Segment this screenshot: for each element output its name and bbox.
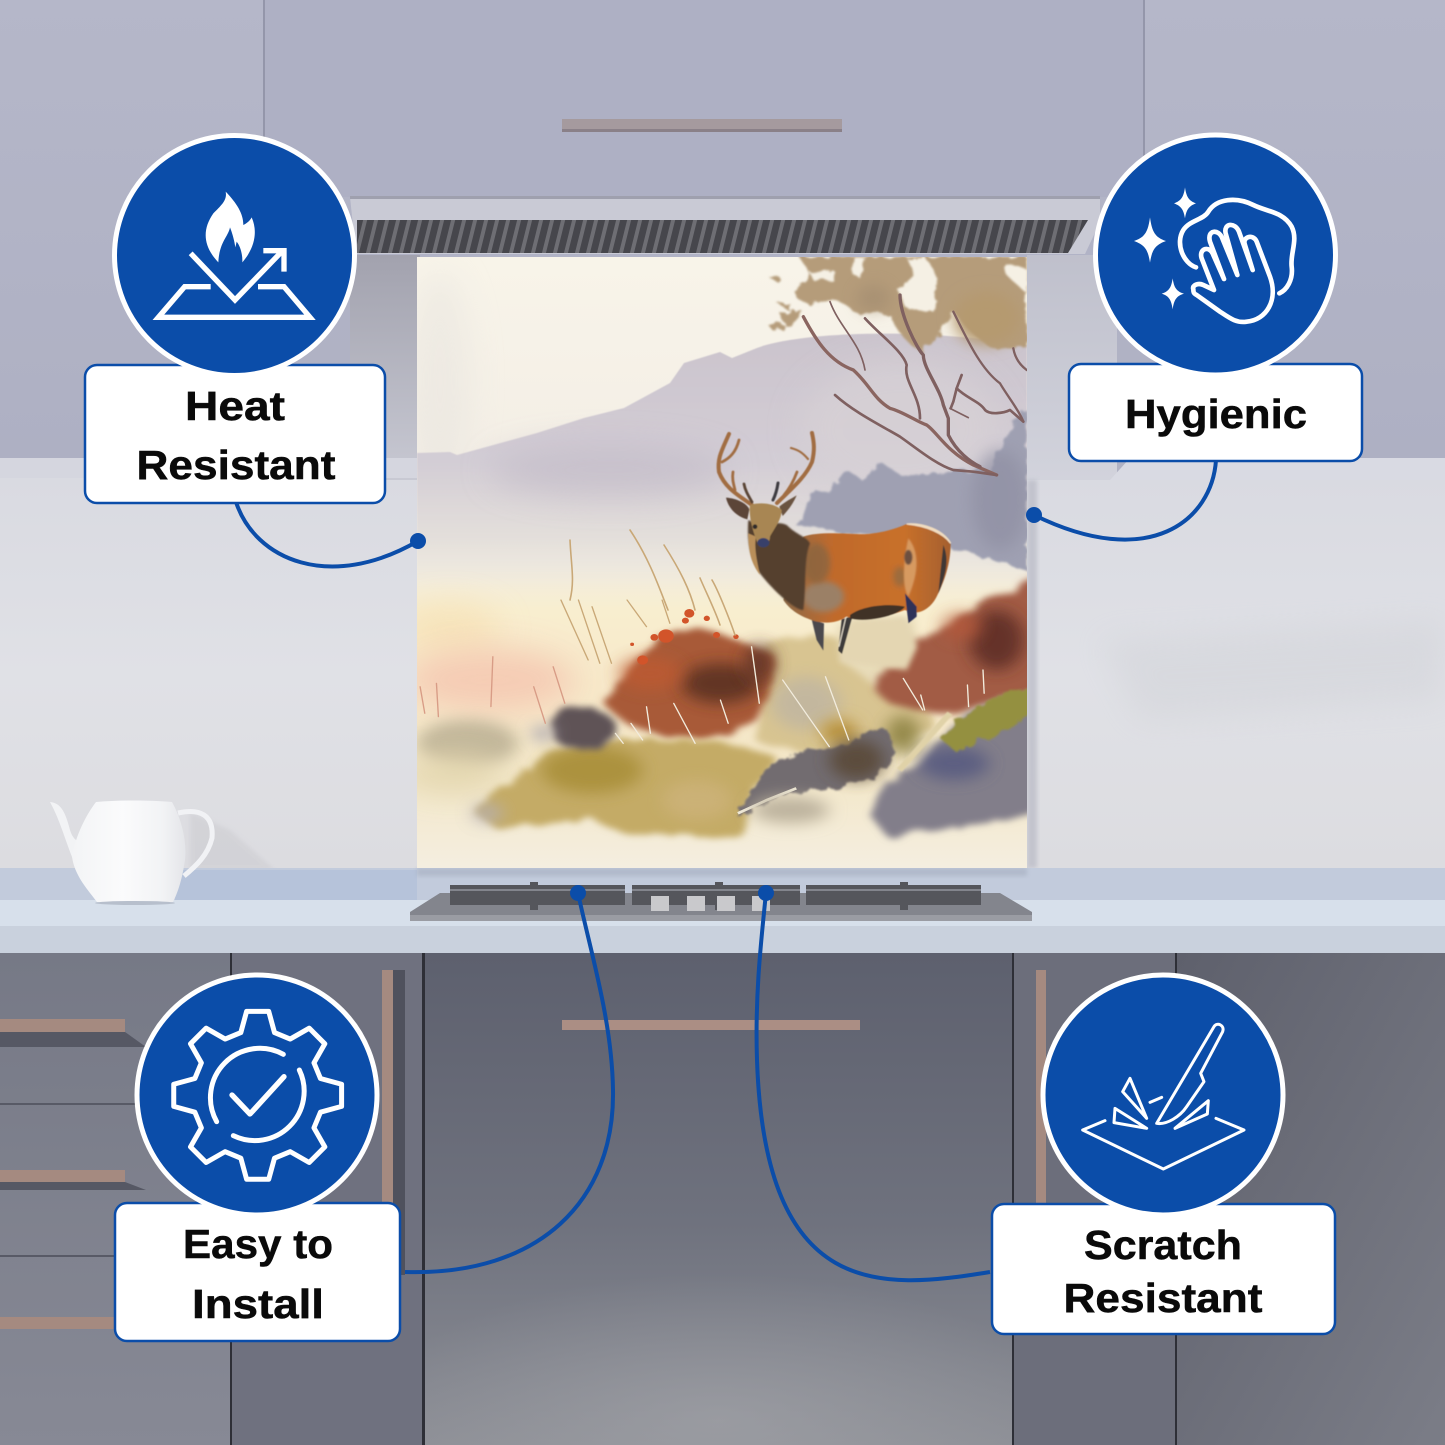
badge circle xyxy=(1096,135,1336,375)
badge circle xyxy=(114,136,354,376)
ears xyxy=(726,498,749,519)
label box xyxy=(115,1203,400,1341)
pale grass blades xyxy=(615,647,984,747)
mid tan grass xyxy=(755,637,930,752)
neck mane xyxy=(748,520,810,610)
label text line 2: Install xyxy=(192,1281,324,1327)
label text line 2: Resistant xyxy=(1064,1275,1263,1321)
callout connector: Scratch Resistant xyxy=(757,885,990,1280)
badge circle xyxy=(137,975,377,1215)
callout connector: Easy to Install xyxy=(405,885,613,1272)
dark hip patch xyxy=(905,593,917,623)
label text: Easy to xyxy=(183,1221,333,1267)
hillside and lower painting, mapped from detail coordinates xyxy=(401,570,1039,841)
pale grass behind legs xyxy=(840,617,917,670)
callout: Hygienic xyxy=(1069,135,1362,461)
pink grass stems xyxy=(420,657,565,723)
label box xyxy=(992,1204,1335,1334)
label text: Scratch xyxy=(1084,1222,1242,1268)
stag xyxy=(719,433,951,670)
label box xyxy=(1069,364,1362,461)
lower cabinets xyxy=(0,953,1445,1445)
right rock xyxy=(868,690,1039,833)
right heather bush xyxy=(872,570,1039,713)
head xyxy=(750,503,782,547)
label box xyxy=(85,365,385,503)
pale grass under stag xyxy=(837,617,923,687)
callout connector: Hygienic xyxy=(1026,460,1216,540)
callout: Easy to Install xyxy=(115,975,400,1341)
label text: Hygienic xyxy=(1125,391,1307,437)
icon: hand wiping with sparkles xyxy=(1134,187,1294,322)
range hood xyxy=(350,196,1100,254)
countertop xyxy=(0,868,1445,953)
ochre foreground grass xyxy=(475,739,779,841)
teapot xyxy=(50,800,212,905)
centre rock xyxy=(736,729,893,817)
painting: watercolor stag on misty moor xyxy=(400,257,1039,868)
callout: Scratch Resistant xyxy=(992,975,1335,1334)
distant forest xyxy=(795,410,1027,570)
background: wall and shelves xyxy=(0,255,1445,870)
tan grass stems xyxy=(561,600,670,663)
distant left grasses xyxy=(417,720,518,767)
gas hob xyxy=(410,882,1032,921)
callout: Heat Resistant xyxy=(85,136,385,503)
orange splatter xyxy=(630,609,739,665)
antlers xyxy=(719,433,814,505)
body xyxy=(783,524,951,623)
mountain xyxy=(417,333,1027,556)
label text line 2: Resistant xyxy=(136,442,336,488)
background: upper cabinets xyxy=(0,0,1445,460)
tree foliage xyxy=(768,257,1027,353)
legs xyxy=(812,619,824,651)
left heather bush xyxy=(604,627,775,738)
tall grass stems above hill xyxy=(570,530,735,635)
tree branches xyxy=(803,295,1027,475)
label text: Heat xyxy=(185,383,285,429)
icon: knife scratching surface xyxy=(1083,1024,1244,1169)
icon: gear with check mark xyxy=(174,1011,342,1179)
olive patches xyxy=(820,720,858,744)
callout connector: Heat Resistant xyxy=(236,502,426,566)
dark left stone xyxy=(549,708,615,749)
warm glow in lower sky xyxy=(417,598,496,650)
badge circle xyxy=(1043,975,1283,1215)
icon: flame reflecting off surface xyxy=(158,192,310,317)
cabinet handles xyxy=(0,970,1046,1329)
